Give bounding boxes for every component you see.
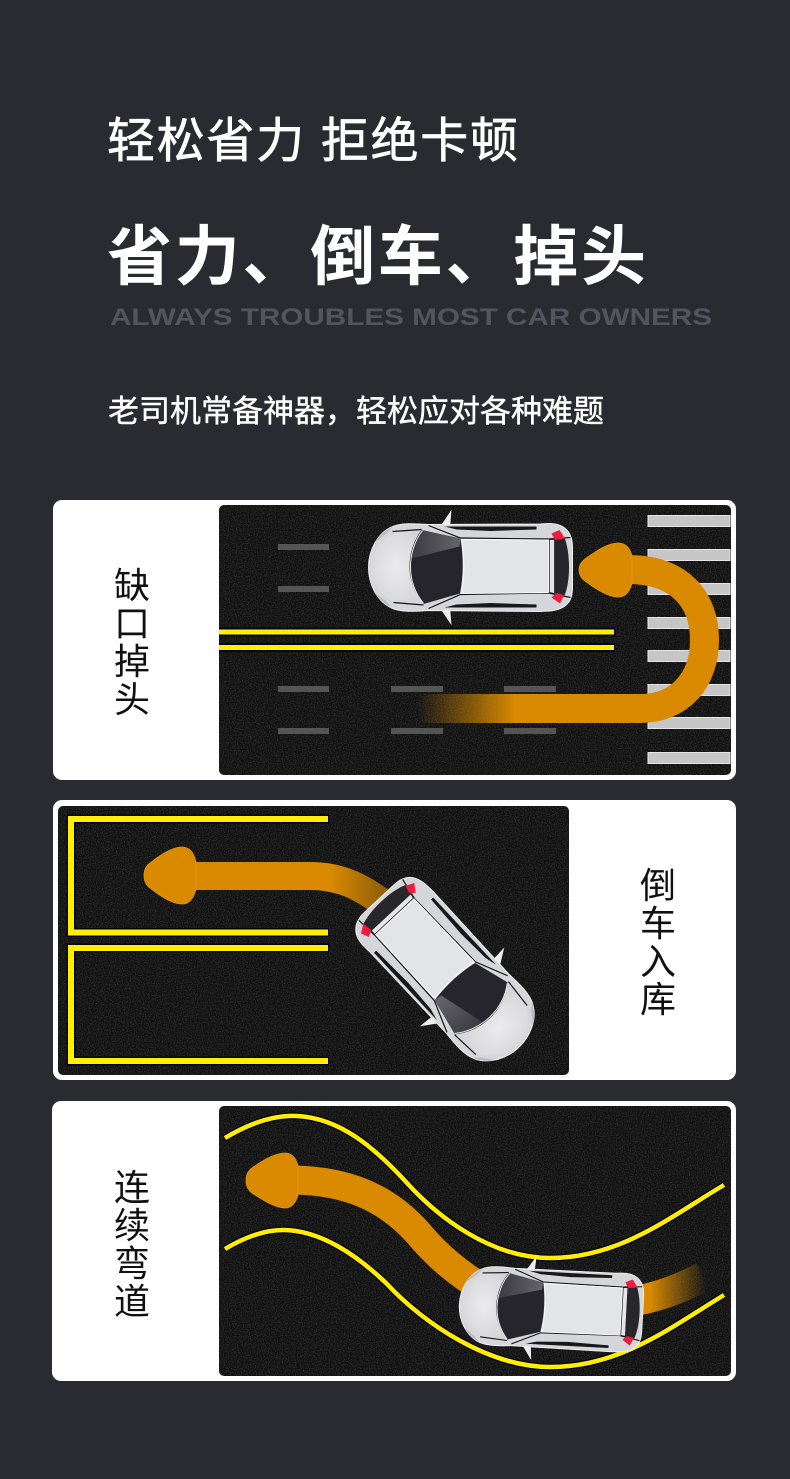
panel: reverse parking: [53, 800, 736, 1085]
car: white car on curve: [457, 1255, 645, 1363]
arrow: U-turn path: [418, 543, 704, 708]
title: top line: 轻松省力 拒绝卡顿: [107, 115, 518, 168]
label: reverse parking: 入: [640, 941, 676, 982]
label: continuous curves: 弯: [114, 1243, 150, 1284]
label: reverse parking: 库: [640, 979, 676, 1020]
label: reverse parking: 车: [640, 903, 676, 944]
panel 1 white card: [53, 500, 736, 780]
road scene 2: [58, 806, 569, 1085]
title: main heading: 省力、倒车、掉头: [107, 220, 646, 293]
subtitle: english: ALWAYS TROUBLES MOST CAR OWNERS: [110, 304, 712, 331]
road scene 3: [219, 1106, 731, 1376]
label: reverse parking: 倒: [640, 865, 676, 906]
label: U-turn: 头: [114, 679, 150, 720]
arrow: curve path: [246, 1153, 703, 1300]
label: continuous curves: 连: [114, 1167, 150, 1208]
panel: continuous curves: [52, 1101, 736, 1381]
arrow: reverse path: [144, 847, 392, 910]
car: top-down white car: [368, 512, 572, 622]
panel 3 white card: [52, 1101, 736, 1381]
car: rotated white car: [339, 861, 559, 1085]
label: continuous curves: 道: [114, 1281, 150, 1322]
label: U-turn: 掉: [114, 641, 150, 682]
label: U-turn: 缺: [114, 565, 150, 606]
road scene 1: [219, 505, 731, 775]
panel: U-turn at gap: [53, 500, 736, 780]
tagline: 老司机常备神器，轻松应对各种难题: [108, 394, 604, 429]
label: U-turn: 口: [114, 603, 150, 644]
panel 2 white card: [53, 800, 736, 1080]
label: continuous curves: 续: [114, 1205, 150, 1246]
